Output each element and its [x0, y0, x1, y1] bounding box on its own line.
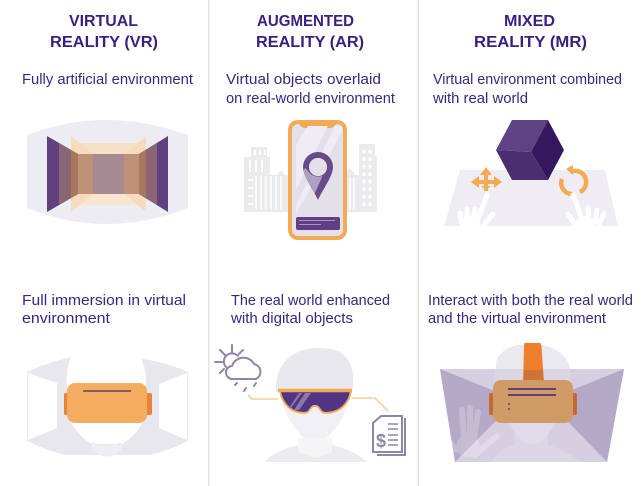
text: virtual environment combined: with real world: [432, 90, 528, 107]
text: real world enhanced: with digital objects: [230, 310, 353, 327]
icon: rotate arrows: [561, 165, 586, 194]
text: fully artificial environment: Fully artificial environment: [22, 71, 194, 88]
text: virtual objects overlaid: on real-world environment: [226, 90, 396, 107]
panel: augmented reality column: [215, 13, 405, 462]
text: full immersion: [22, 292, 186, 327]
illustration: person wearing VR headset: [27, 355, 188, 456]
text: virtual objects overlaid: Virtual objects overlaid: [226, 71, 381, 88]
illustration: smartphone: [290, 121, 345, 238]
heading: virtual reality: [50, 13, 158, 51]
icon: invoice document: $: [376, 431, 386, 451]
text: interact with both: [428, 292, 633, 327]
text: full immersion: environment: [22, 310, 111, 327]
heading: virtual reality: VIRTUAL: [69, 13, 138, 30]
illustration: holographic table: [444, 170, 618, 226]
icon: location pin: [303, 152, 333, 200]
panel: mixed reality column: [428, 13, 633, 462]
illustration: virtual room: [27, 120, 188, 224]
icon: purple cube: [496, 120, 564, 180]
illustration: city skyline: [244, 144, 377, 212]
phone info panel: [296, 217, 340, 230]
icon: left hand touch: [460, 195, 493, 234]
illustration: person wearing AR glasses: [248, 348, 388, 462]
text: interact with both: Interact with both the real world: [428, 292, 633, 309]
text: real world enhanced: The real world enhanced: [231, 292, 390, 309]
heading: augmented reality: AUGMENTED: [257, 13, 354, 30]
text: virtual objects overlaid: [226, 71, 396, 107]
illustration: person in mixed reality headset: [440, 343, 624, 462]
heading: augmented reality: REALITY (AR): [256, 34, 364, 51]
text: real world enhanced: [230, 292, 390, 327]
heading: virtual reality: REALITY (VR): [50, 34, 158, 51]
text: interact with both: and the virtual environment: [428, 310, 607, 327]
heading: mixed reality: [474, 13, 587, 51]
text: full immersion: Full immersion in virtual: [22, 292, 186, 309]
icon: weather cloud and sun: [215, 345, 260, 391]
heading: mixed reality: MIXED: [504, 13, 555, 30]
hand outline: [441, 408, 497, 455]
connector lines: [248, 395, 278, 399]
icon: right hand touch: [568, 195, 604, 234]
text: virtual environment combined: [432, 71, 622, 107]
heading: augmented reality: [256, 13, 364, 51]
heading: mixed reality: REALITY (MR): [474, 34, 587, 51]
panel: virtual reality column: [22, 13, 194, 456]
text: virtual environment combined: Virtual environment combined: [433, 71, 622, 88]
icon: invoice document: [373, 416, 405, 455]
icon: move arrows: [471, 167, 502, 191]
